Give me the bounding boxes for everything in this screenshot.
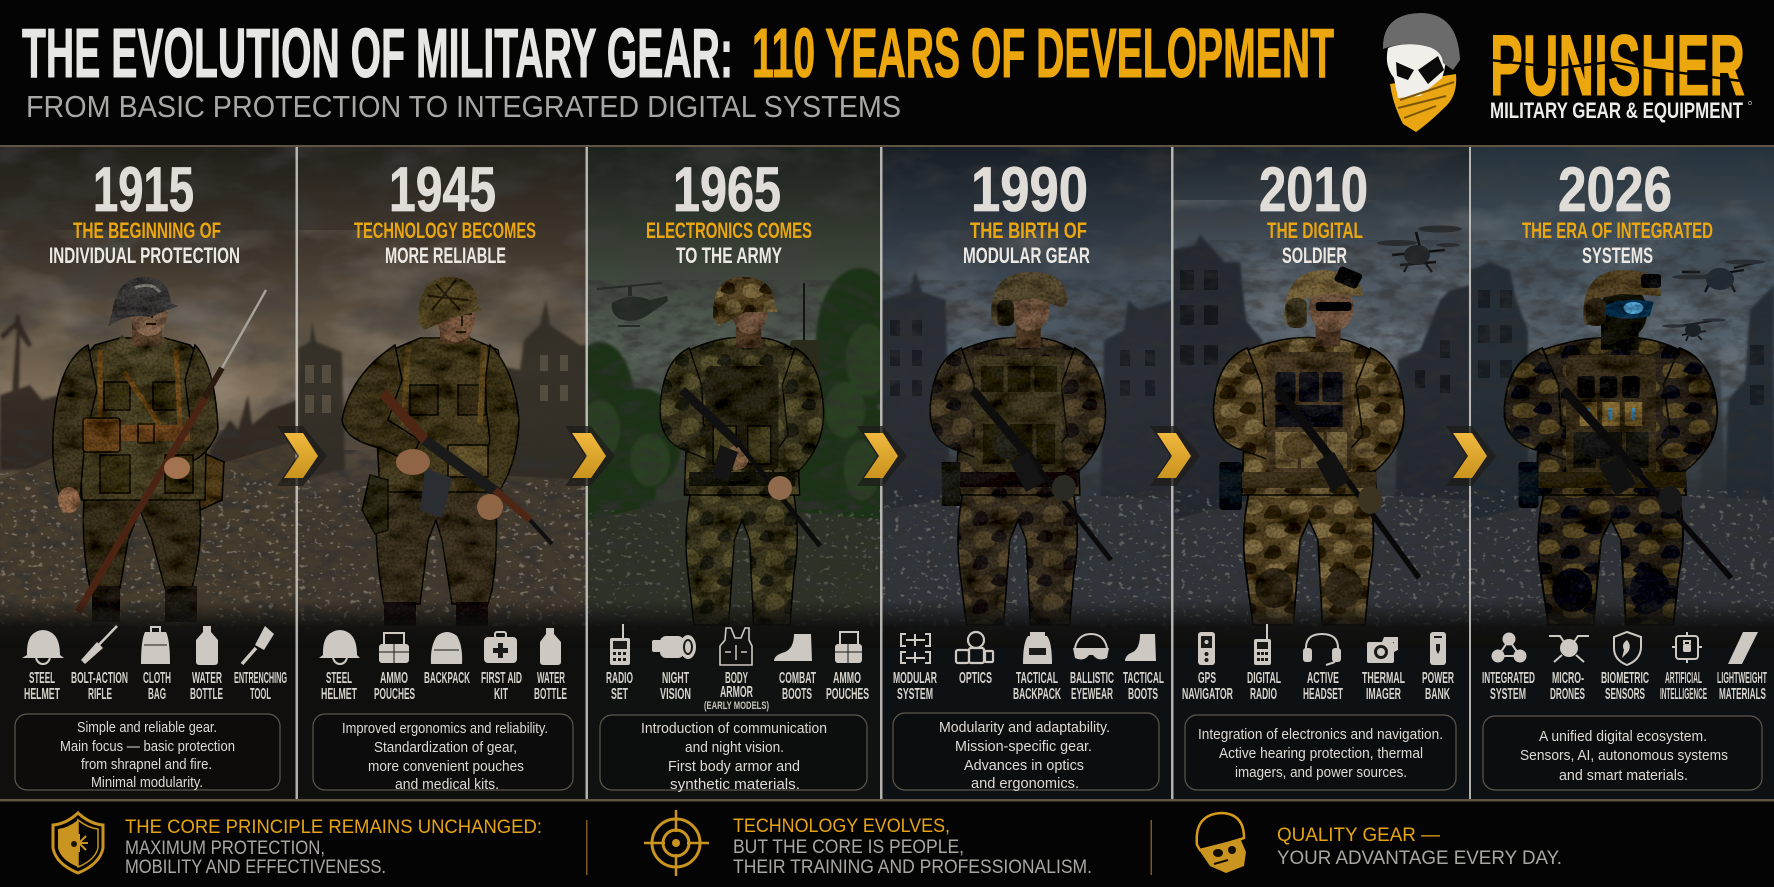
gear: backpack (424, 632, 470, 687)
text box: Integration of electronics and navigation. (1198, 727, 1443, 743)
heading: MODULAR GEAR (963, 243, 1090, 268)
title: main heading: THE EVOLUTION OF MILITARY GEAR: (22, 14, 733, 92)
gear: tactical backpack: TACTICAL (1016, 670, 1058, 687)
gear: water bottle: WATER (192, 670, 222, 687)
gear: combat boots (774, 634, 816, 703)
text box (893, 713, 1159, 792)
gear: artificial intelligence (1660, 632, 1707, 703)
heading: MORE RELIABLE (385, 243, 506, 268)
panel: 2026 (1470, 146, 1774, 801)
drone (1377, 226, 1462, 272)
gear: biometric sensors (1601, 632, 1649, 703)
gear: thermal imager: IMAGER (1366, 686, 1401, 703)
text box: Minimal modularity. (91, 775, 203, 791)
arrow: 1965 to 1990 (857, 426, 907, 486)
heading (1267, 218, 1363, 268)
gear: radio set (606, 624, 633, 703)
gear: bolt-action rifle: BOLT-ACTION (71, 670, 128, 687)
gear: active headset: ACTIVE (1307, 670, 1339, 687)
icon: shield (53, 813, 103, 873)
ground rubble (0, 444, 296, 522)
footer: core principle: MAXIMUM PROTECTION, (125, 838, 325, 859)
heading: TO THE ARMY (676, 243, 782, 268)
footer: technology evolves: TECHNOLOGY EVOLVES, (733, 816, 950, 837)
heading: INDIVIDUAL PROTECTION (49, 243, 240, 268)
gear: water bottle (534, 628, 567, 703)
gear: biometric sensors: SENSORS (1605, 686, 1645, 703)
gear: combat boots: BOOTS (782, 686, 812, 703)
gear: power bank: BANK (1425, 686, 1450, 703)
bayonet rifle (78, 290, 266, 612)
gear: tactical boots (1123, 634, 1164, 703)
gear: GPS navigator (1182, 632, 1233, 703)
heading: THE BIRTH OF (970, 218, 1087, 243)
arrow: 1990 to 2010 (1150, 426, 1200, 486)
soldier: integrated systems (1504, 270, 1731, 625)
gear: steel helmet (22, 630, 64, 703)
arrow: 1915 to 1945 (277, 426, 327, 486)
gear: active headset: HEADSET (1303, 686, 1343, 703)
title: main heading: 110 YEARS OF DEVELOPMENT (752, 14, 1334, 92)
gear: lightweight materials (1717, 632, 1767, 703)
text box: Sensors, AI, autonomous systems (1520, 748, 1728, 764)
text box: and ergonomics. (971, 776, 1079, 792)
text box: synthetic materials. (670, 777, 800, 793)
text box: from shrapnel and fire. (81, 757, 212, 773)
gear: ballistic eyewear (1070, 634, 1114, 703)
year: 1990 (971, 155, 1088, 225)
year: 2026 (1558, 155, 1672, 225)
gear: radio set: RADIO (606, 670, 633, 687)
gear: entrenching tool (234, 626, 287, 703)
panel: 1965 (587, 147, 881, 799)
heading (50, 222, 239, 263)
text box: imagers, and power sources. (1235, 765, 1407, 781)
text box: and smart materials. (1559, 768, 1688, 784)
jungle foliage (587, 266, 881, 520)
text box (600, 715, 867, 793)
heading: THE DIGITAL (1267, 218, 1363, 243)
footer: core principle: THE CORE PRINCIPLE REMAINS UNCHANGED: (125, 817, 542, 838)
gear: body armor: BODY (725, 670, 748, 687)
text box: and medical kits. (395, 777, 499, 793)
gear: ammo pouches (826, 632, 869, 703)
soldier: Vietnam-era with radio (660, 277, 824, 625)
ground rubble (300, 476, 586, 606)
gear: ballistic eyewear: EYEWEAR (1071, 686, 1113, 703)
heading (1522, 218, 1713, 268)
icon: skull with helmet and bandana (1383, 13, 1460, 132)
gear: thermal imager (1362, 637, 1405, 703)
gear: ballistic eyewear: BALLISTIC (1070, 670, 1114, 687)
footer: quality gear: QUALITY GEAR — (1277, 825, 1440, 846)
heading: SYSTEMS (1582, 243, 1653, 268)
text box: Improved ergonomics and reliability. (342, 721, 548, 737)
gear: micro-drones: DRONES (1550, 686, 1585, 703)
gear: first aid kit: KIT (494, 686, 508, 703)
gear: optics (956, 632, 993, 687)
ruined poles and debris (0, 314, 296, 472)
footer: technology evolves: BUT THE CORE IS PEOPLE, (733, 837, 964, 858)
icon: skull helmet (1197, 813, 1246, 873)
footer: quality gear (1197, 813, 1562, 873)
soldier: WWII infantryman (342, 277, 519, 626)
gear: cloth bag: BAG (148, 686, 166, 703)
ruined buildings (1470, 262, 1774, 520)
text box (1483, 716, 1762, 790)
text box: Modularity and adaptability. (939, 720, 1110, 736)
ruined buildings (298, 300, 587, 480)
gear: body armor: (EARLY MODELS) (704, 700, 769, 712)
year: 1965 (673, 155, 781, 225)
gear: combat boots: COMBAT (779, 670, 816, 687)
gear: night vision: VISION (660, 686, 691, 703)
heading (963, 218, 1090, 268)
gear: tactical boots: BOOTS (1128, 686, 1158, 703)
drone (1662, 318, 1726, 341)
text box (313, 714, 573, 793)
ground rubble (881, 490, 1172, 640)
ruined buildings (1172, 235, 1470, 520)
gear: body armor (704, 628, 769, 712)
gear: modular system: MODULAR (893, 670, 937, 687)
text box: Simple and reliable gear. (77, 720, 217, 736)
footer: quality gear: YOUR ADVANTAGE EVERY DAY. (1277, 848, 1562, 869)
helicopter (597, 283, 668, 326)
heading (647, 222, 812, 263)
year: 1915 (93, 155, 194, 225)
text box (15, 714, 280, 791)
gear: digital radio: DIGITAL (1247, 670, 1281, 687)
heading: SOLDIER (1282, 243, 1347, 268)
panel: 2010 (1172, 146, 1470, 801)
gear: digital radio (1247, 624, 1281, 703)
subtitle: FROM BASIC PROTECTION TO INTEGRATED DIGITAL SYSTEMS (26, 89, 901, 124)
gear: radio set: SET (611, 686, 628, 703)
heading: THE BEGINNING OF (73, 218, 221, 243)
gear: water bottle (190, 626, 223, 703)
gear: optics: OPTICS (959, 670, 992, 687)
arrow: 2010 to 2026 (1446, 426, 1496, 486)
gear: cloth bag (141, 627, 171, 703)
gear: cloth bag: CLOTH (143, 670, 171, 687)
text box: Active hearing protection, thermal (1219, 746, 1423, 762)
footer: core principle: MOBILITY AND EFFECTIVENESS. (125, 857, 386, 878)
gear: first aid kit: FIRST AID (481, 670, 522, 687)
soldier: WWI infantryman (53, 277, 224, 622)
M1 style rifle (383, 393, 552, 544)
gear: ammo pouches: POUCHES (826, 686, 869, 703)
gear: digital radio: RADIO (1250, 686, 1277, 703)
text box: A unified digital ecosystem. (1539, 729, 1707, 745)
text box: Introduction of communication (641, 721, 827, 737)
ruined buildings (881, 270, 1172, 520)
panel: 1990 (881, 146, 1172, 801)
gear: ammo pouches (374, 633, 415, 703)
gear: micro-drones (1549, 636, 1589, 703)
ground rubble (1172, 490, 1470, 640)
gear: thermal imager: THERMAL (1362, 670, 1405, 687)
gear: bolt-action rifle: RIFLE (88, 686, 112, 703)
arrow: 1945 to 1965 (565, 426, 615, 486)
icon: crosshair target (644, 810, 709, 876)
gear: active headset (1303, 634, 1343, 703)
gear: night vision: NIGHT (662, 670, 689, 687)
year: 1945 (389, 155, 496, 225)
ground rubble (1470, 490, 1774, 640)
gear: steel helmet (319, 630, 360, 703)
gear: water bottle: WATER (537, 670, 565, 687)
text box (1185, 715, 1456, 790)
text box: more convenient pouches (368, 759, 524, 775)
drone (1672, 260, 1765, 292)
gear: tactical backpack: BACKPACK (1013, 686, 1061, 703)
ground (588, 508, 880, 540)
footer: technology evolves (644, 810, 1092, 878)
gear: GPS navigator: GPS (1198, 670, 1216, 687)
gear: ammo pouches: POUCHES (374, 686, 415, 703)
gear: modular system: SYSTEM (897, 686, 933, 703)
gear: integrated system: SYSTEM (1490, 686, 1526, 703)
gear: water bottle: BOTTLE (190, 686, 223, 703)
gear: micro-drones: MICRO- (1552, 670, 1584, 687)
gear: steel helmet: HELMET (321, 686, 357, 703)
gear: integrated system (1482, 632, 1535, 703)
text box: Advances in optics (964, 758, 1084, 774)
panel: 1945 (297, 146, 587, 801)
gear: ammo pouches: AMMO (380, 670, 408, 687)
panel: 2026: ARTIFICIAL (1665, 670, 1702, 687)
year: 2010 (1259, 155, 1368, 225)
gear: ammo pouches: AMMO (833, 670, 861, 687)
panel: 1915: ENTRENCHING (234, 670, 287, 687)
logo: Punisher brand (1383, 13, 1752, 132)
gear: steel helmet: STEEL (326, 670, 352, 687)
gear: tactical backpack (1013, 632, 1061, 703)
gear: power bank (1422, 632, 1454, 703)
gear: modular system (893, 634, 937, 703)
gear: integrated system: INTEGRATED (1482, 670, 1535, 687)
text box: Mission-specific gear. (955, 739, 1092, 755)
gear: steel helmet: STEEL (29, 670, 55, 687)
gear: first aid kit (481, 632, 522, 703)
gear: night vision (652, 635, 696, 703)
gear: entrenching tool: TOOL (250, 686, 271, 703)
gear: bolt-action rifle (71, 626, 128, 703)
gear: water bottle: BOTTLE (534, 686, 567, 703)
heading: ELECTRONICS COMES (646, 218, 812, 243)
text box: Standardization of gear, (374, 740, 517, 756)
text box: Main focus — basic protection (60, 739, 235, 755)
text box: First body armor and (668, 759, 800, 775)
gear: power bank: POWER (1422, 670, 1454, 687)
footer: core principle (53, 813, 542, 878)
gear: backpack: BACKPACK (424, 670, 470, 687)
gear: biometric sensors: BIOMETRIC (1601, 670, 1649, 687)
soldier: digital soldier (1213, 266, 1419, 625)
soldier: 1990s modular gear (930, 272, 1111, 625)
heading (354, 222, 536, 263)
heading: TECHNOLOGY BECOMES (354, 218, 536, 243)
footer: technology evolves: THEIR TRAINING AND PROFESSIONALISM. (733, 857, 1092, 878)
gear: steel helmet: HELMET (24, 686, 60, 703)
panel: 1915 (0, 146, 297, 801)
gear: GPS navigator: NAVIGATOR (1182, 686, 1233, 703)
panel: 2026: INTELLIGENCE (1660, 686, 1707, 703)
gear: body armor: ARMOR (720, 684, 753, 701)
gear: tactical boots: TACTICAL (1123, 670, 1164, 687)
text box: and night vision. (685, 740, 784, 756)
